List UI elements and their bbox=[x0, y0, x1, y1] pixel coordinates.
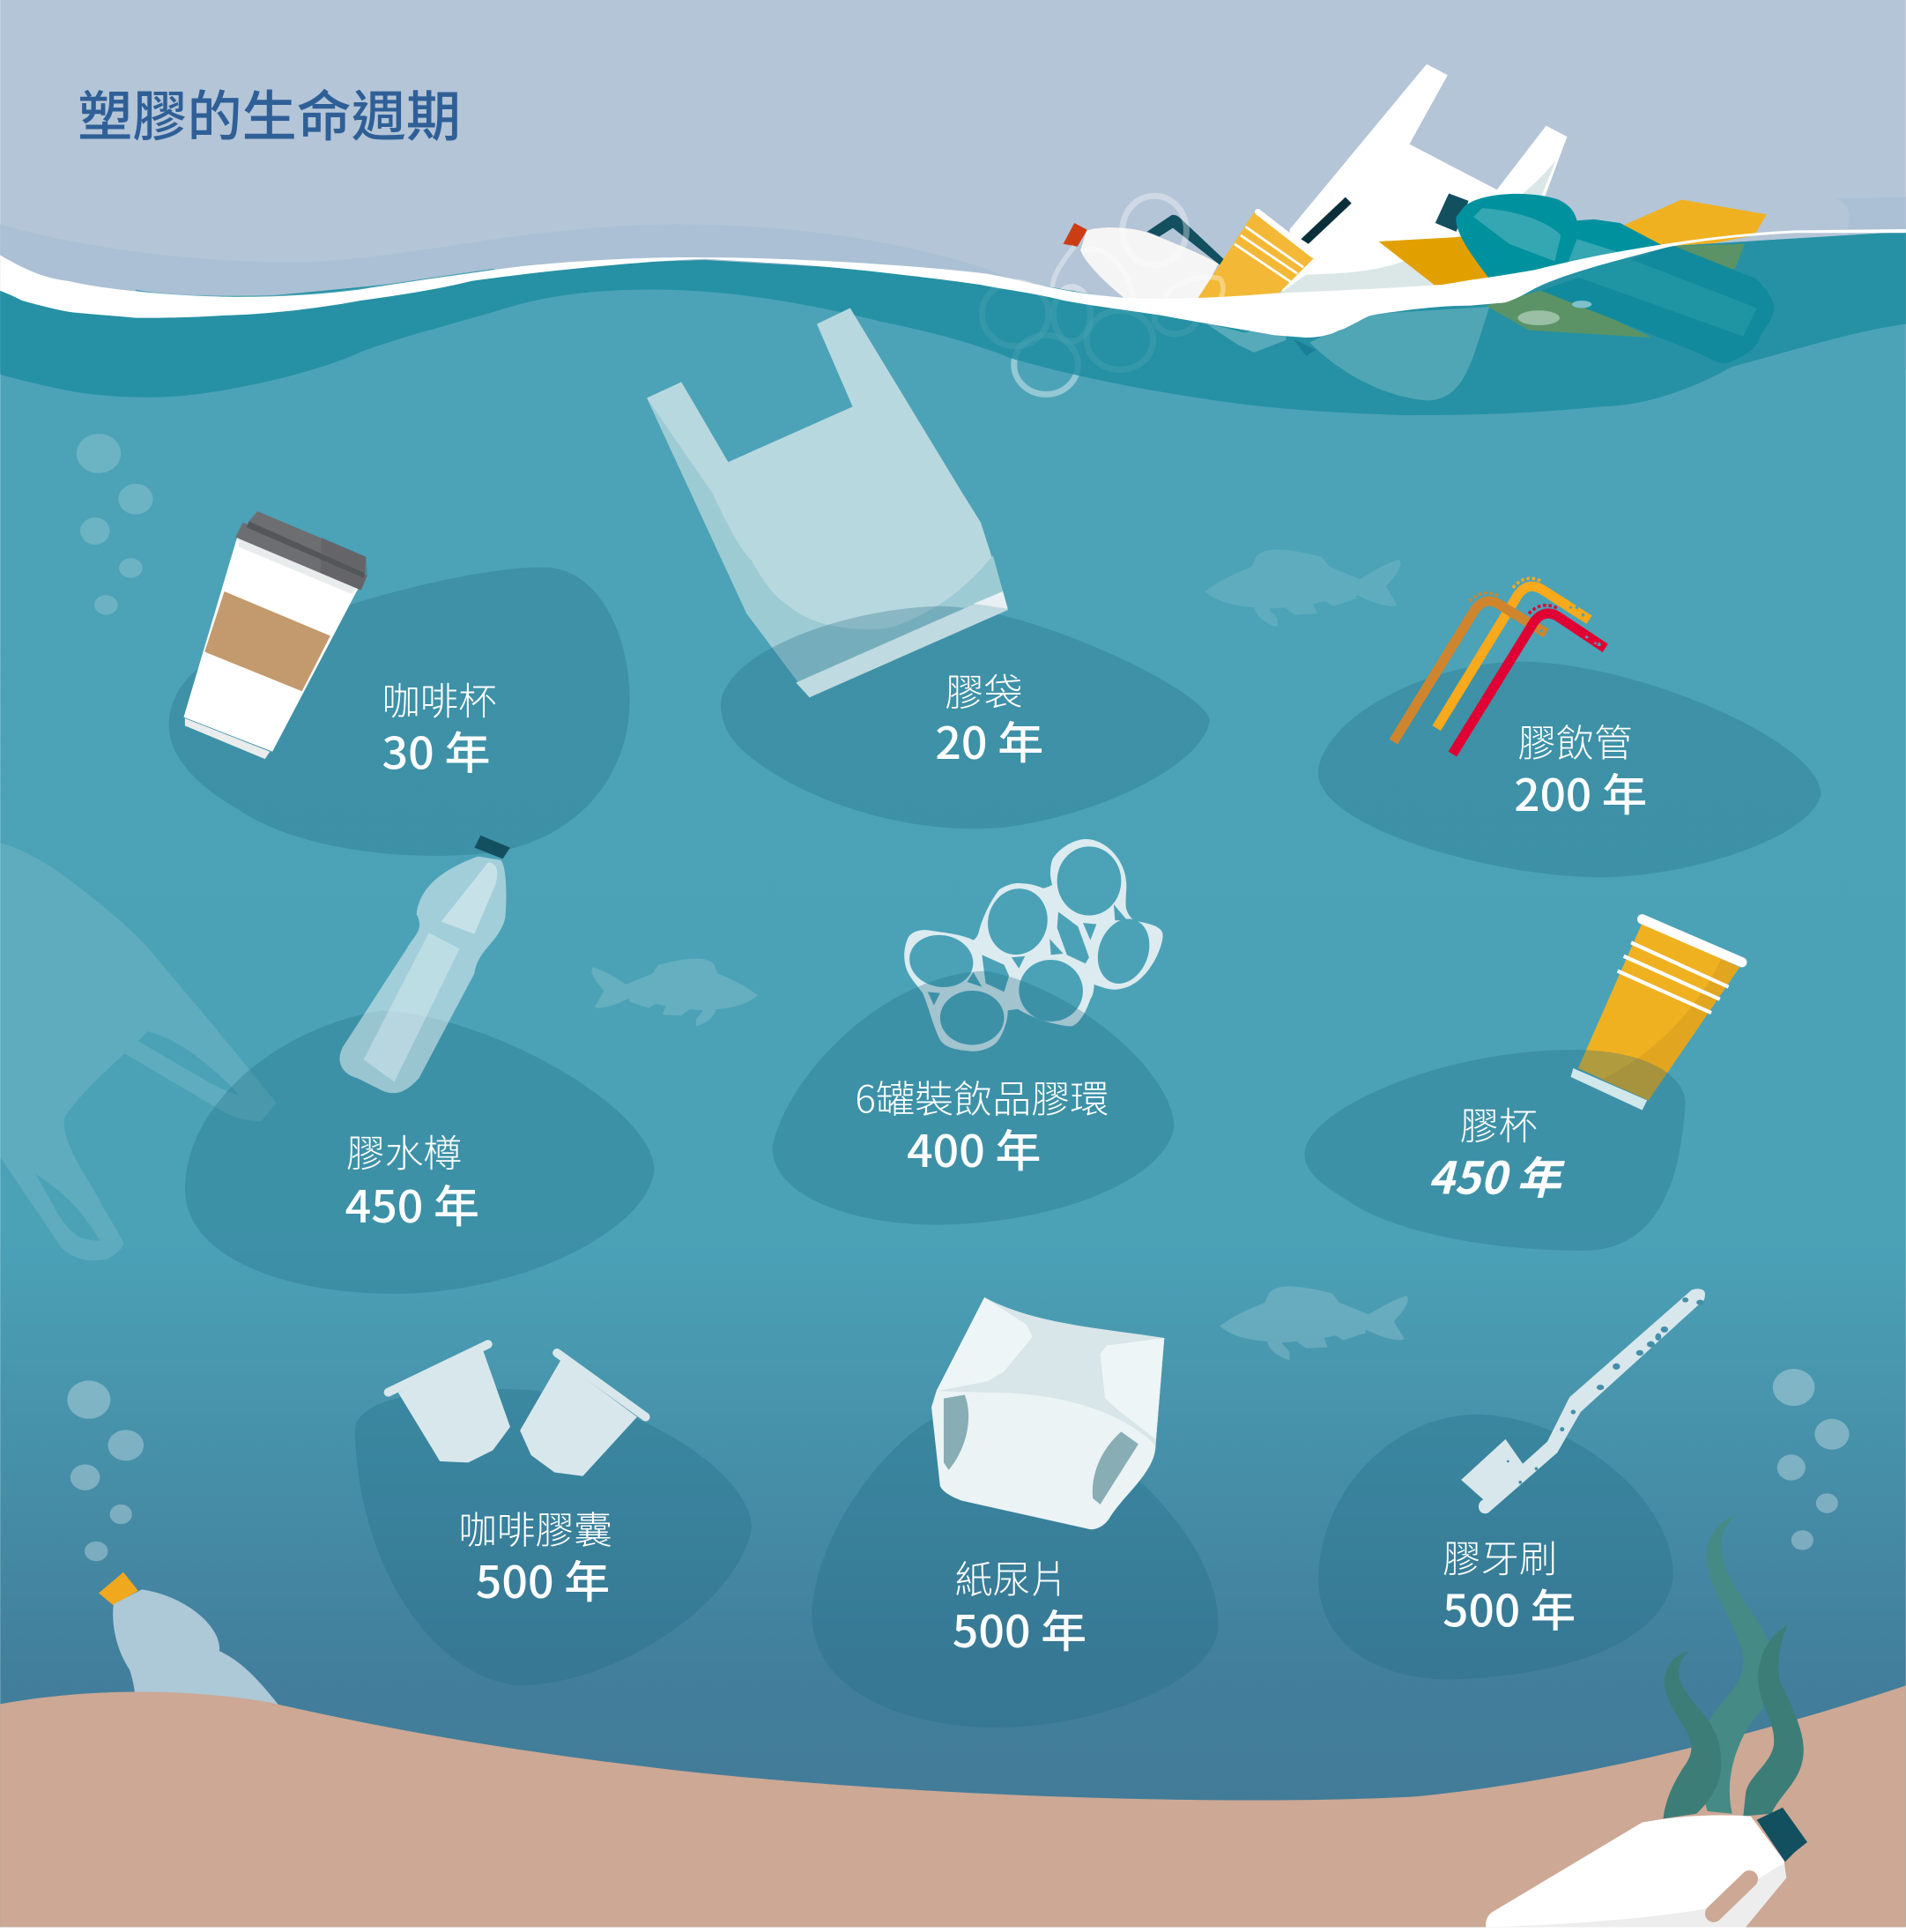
underwater teal bottle bbox=[1541, 245, 1774, 363]
panel: diaper bbox=[812, 1297, 1219, 1728]
label: toothbrush: 膠牙刷 bbox=[1442, 1529, 1557, 1584]
icon: diaper bbox=[931, 1297, 1164, 1529]
icon: toothbrush bbox=[1461, 1289, 1705, 1513]
blob: plastic cup bbox=[1305, 1050, 1686, 1251]
years: toothbrush: 500 年 bbox=[1442, 1576, 1576, 1639]
seabed sand bbox=[0, 1685, 1906, 1927]
panel: water bottle bbox=[185, 836, 654, 1294]
years: plastic bag: 20 年 bbox=[935, 709, 1043, 772]
white foam line bbox=[0, 229, 1906, 338]
blob: plastic bag bbox=[721, 606, 1210, 829]
dark surface band bbox=[0, 232, 1906, 415]
white jug on seabed bbox=[1486, 1808, 1807, 1927]
panel: plastic bag bbox=[647, 308, 1210, 829]
years: coffee capsule: 500 年 bbox=[476, 1548, 610, 1611]
blob: diaper bbox=[812, 1417, 1219, 1728]
fish: middle bbox=[591, 959, 758, 1026]
teal bottle above surface bbox=[1435, 193, 1687, 290]
sky bbox=[0, 0, 1906, 369]
years: diaper: 500 年 bbox=[953, 1597, 1086, 1661]
icon: straws bbox=[1393, 578, 1606, 754]
label: diaper: 紙尿片 bbox=[955, 1550, 1068, 1605]
label: coffee cup: 咖啡杯 bbox=[382, 672, 497, 726]
panel: plastic cup bbox=[1305, 919, 1742, 1251]
distant wave bbox=[0, 197, 1906, 320]
blob: coffee capsule bbox=[355, 1389, 752, 1685]
underwater teal fragment bbox=[1205, 323, 1287, 353]
seaweed: front right bbox=[1743, 1625, 1804, 1817]
years: six pack rings: 400 年 bbox=[907, 1117, 1041, 1180]
bubbles: upper left bbox=[77, 434, 153, 615]
label: coffee capsule: 咖啡膠囊 bbox=[458, 1501, 612, 1556]
fish: lower right bbox=[1220, 1286, 1408, 1360]
fish: upper right bbox=[1205, 549, 1401, 628]
label: straws: 膠飲管 bbox=[1517, 713, 1632, 768]
label: plastic cup: 膠杯 bbox=[1460, 1096, 1538, 1151]
title: 塑膠的生命週期 bbox=[78, 72, 461, 152]
years: water bottle: 450 年 bbox=[345, 1172, 479, 1236]
years: coffee cup: 30 年 bbox=[382, 718, 491, 782]
bottle on seabed, left bbox=[99, 1572, 290, 1719]
blob: coffee cup bbox=[169, 568, 630, 856]
yellow cup at surface bbox=[1197, 212, 1315, 301]
blob: straws bbox=[1318, 662, 1821, 877]
panel: coffee cup bbox=[169, 511, 630, 856]
icon: six pack rings bbox=[904, 839, 1163, 1051]
blob: six pack rings bbox=[773, 971, 1174, 1225]
dark strip under surface bbox=[1294, 338, 1316, 356]
seaweed: front left bbox=[1663, 1651, 1721, 1818]
blob: water bottle bbox=[185, 1010, 654, 1294]
ghost plastic bag at left bbox=[0, 843, 276, 1260]
underwater six pack rings bbox=[982, 282, 1197, 394]
years: straws: 200 年 bbox=[1514, 761, 1647, 824]
dark ring handle bbox=[1147, 215, 1225, 265]
icon: water bottle bbox=[340, 836, 510, 1093]
bubbles: lower right bbox=[1773, 1369, 1850, 1550]
label: water bottle: 膠水樽 bbox=[346, 1124, 462, 1178]
icon: coffee cup bbox=[183, 511, 367, 759]
seaweed: back lower bbox=[1701, 1706, 1764, 1814]
underwater bag shape at surface bbox=[1309, 307, 1489, 400]
bubbles: lower left bbox=[67, 1380, 144, 1561]
panel: plastic straws bbox=[1318, 578, 1821, 877]
bag hem bbox=[796, 591, 1008, 697]
seaweed: back bbox=[1701, 1514, 1774, 1814]
underwater yellow box bbox=[1486, 244, 1745, 338]
six pack rings at surface bbox=[1052, 196, 1223, 301]
panel: six pack rings bbox=[773, 839, 1174, 1225]
white bottle at surface bbox=[1064, 223, 1219, 301]
label: six pack rings: 6罐裝飲品膠環 bbox=[855, 1069, 1109, 1124]
icon: plastic cup bbox=[1578, 919, 1742, 1100]
thin teal line above foam bbox=[136, 270, 494, 296]
panel: coffee capsule bbox=[355, 1344, 752, 1685]
cup base rim bbox=[1571, 1068, 1647, 1111]
years: plastic cup: 450 年 bbox=[1428, 1144, 1565, 1208]
icon: coffee capsules bbox=[389, 1344, 646, 1476]
blob: toothbrush bbox=[1318, 1415, 1673, 1679]
icon: plastic bag bbox=[647, 308, 1008, 697]
label: plastic bag: 膠袋 bbox=[945, 663, 1022, 717]
panel: toothbrush bbox=[1318, 1289, 1705, 1679]
floating plastic bag above surface bbox=[1276, 64, 1567, 296]
yellow box piece bbox=[1378, 199, 1767, 290]
